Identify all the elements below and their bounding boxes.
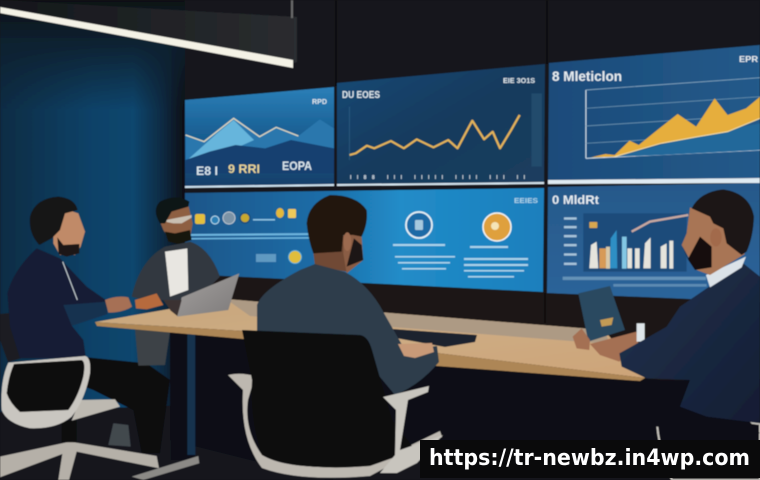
row of small icons: [195, 208, 302, 264]
right chair: [657, 410, 760, 480]
screen 1 labels: E8 I: [196, 164, 218, 178]
wall band beneath screens: [185, 270, 760, 400]
left chair: [0, 356, 159, 480]
suit: [619, 263, 760, 423]
cuff: [637, 323, 645, 342]
lower jacket: [135, 328, 170, 366]
legs: [593, 380, 760, 433]
orange trend line: [349, 93, 542, 167]
neck: [313, 235, 348, 272]
center person: [257, 195, 439, 395]
arm highlight: [63, 302, 107, 326]
screen 1 labels: RPD: [312, 99, 327, 106]
hair: [156, 197, 189, 223]
base: [0, 442, 159, 480]
shoe: [108, 423, 131, 447]
shell inner: [7, 360, 84, 412]
face: [159, 205, 193, 240]
hand: [398, 343, 434, 358]
second person behind table: [132, 197, 220, 366]
screen 3 title: 8 Mleticlon: [552, 68, 622, 84]
screen 1 labels: EOPA: [282, 159, 312, 173]
sweater: [257, 264, 439, 395]
column: [62, 421, 77, 442]
tablet: [578, 286, 625, 342]
jacket: [132, 242, 220, 300]
white shirt: [165, 248, 188, 297]
screen 2: line chart: [337, 64, 545, 186]
screen 5: bar chart panel: [547, 183, 760, 302]
hand: [105, 297, 132, 313]
ceiling light fixture: [0, 0, 297, 68]
beard: [683, 237, 712, 270]
screen 1 labels: 9 RRI: [228, 162, 260, 176]
vertical wall seams: [336, 0, 547, 323]
circular badge orange: [483, 213, 511, 241]
screen 1 labels: [196, 99, 327, 178]
bars: [563, 213, 707, 287]
screen 2 labels: [342, 78, 535, 181]
hair: [692, 189, 754, 255]
tablet artwork: [600, 317, 613, 327]
screen 2 labels: II88 III IIIII IIII III II: [350, 175, 526, 181]
gold area chart: [586, 78, 760, 158]
left person chair back: [0, 313, 22, 362]
black back: [242, 330, 415, 468]
screen 2 labels: DU EOES: [342, 90, 380, 101]
glasses: [166, 215, 192, 223]
ear: [710, 228, 722, 246]
seat: [72, 399, 120, 421]
screen 1: mountain chart: [185, 87, 334, 188]
left person: [7, 197, 170, 453]
shirt collar: [706, 257, 746, 287]
face: [682, 207, 745, 275]
screen 2 labels: EIE 3O1S: [503, 78, 535, 85]
left blue wall: [0, 0, 185, 415]
under-table shadow: [170, 330, 660, 480]
mountain graphic: [186, 118, 334, 173]
screen 5 title: 0 MldRt: [552, 193, 599, 207]
screen 3: area chart: [548, 45, 760, 184]
hands and phone: [135, 293, 163, 309]
armrest: [380, 386, 443, 473]
table leg: [132, 332, 199, 480]
screen 3 title: EPR: [739, 55, 758, 64]
beard: [57, 237, 79, 257]
circular badge blue: [406, 212, 432, 238]
screen 4: wide bright dashboard: [185, 188, 544, 292]
shell: [1, 356, 90, 428]
legs: [67, 357, 170, 453]
right person: [573, 189, 760, 433]
website URL banner: [420, 440, 760, 478]
jacket: [7, 248, 107, 358]
screen 4 text lines: EEIES: [514, 198, 538, 205]
white frame: [228, 374, 442, 478]
laptop: [163, 273, 239, 317]
beard: [165, 230, 192, 244]
keyboard: [393, 329, 477, 347]
hands: [573, 328, 638, 362]
head: [307, 195, 367, 273]
floor: [0, 405, 760, 480]
face: [53, 210, 85, 255]
hair: [30, 197, 78, 245]
screen 3 title: [552, 55, 758, 84]
center chair: [228, 330, 443, 478]
zip cord: [63, 262, 77, 300]
table top: [95, 299, 645, 381]
